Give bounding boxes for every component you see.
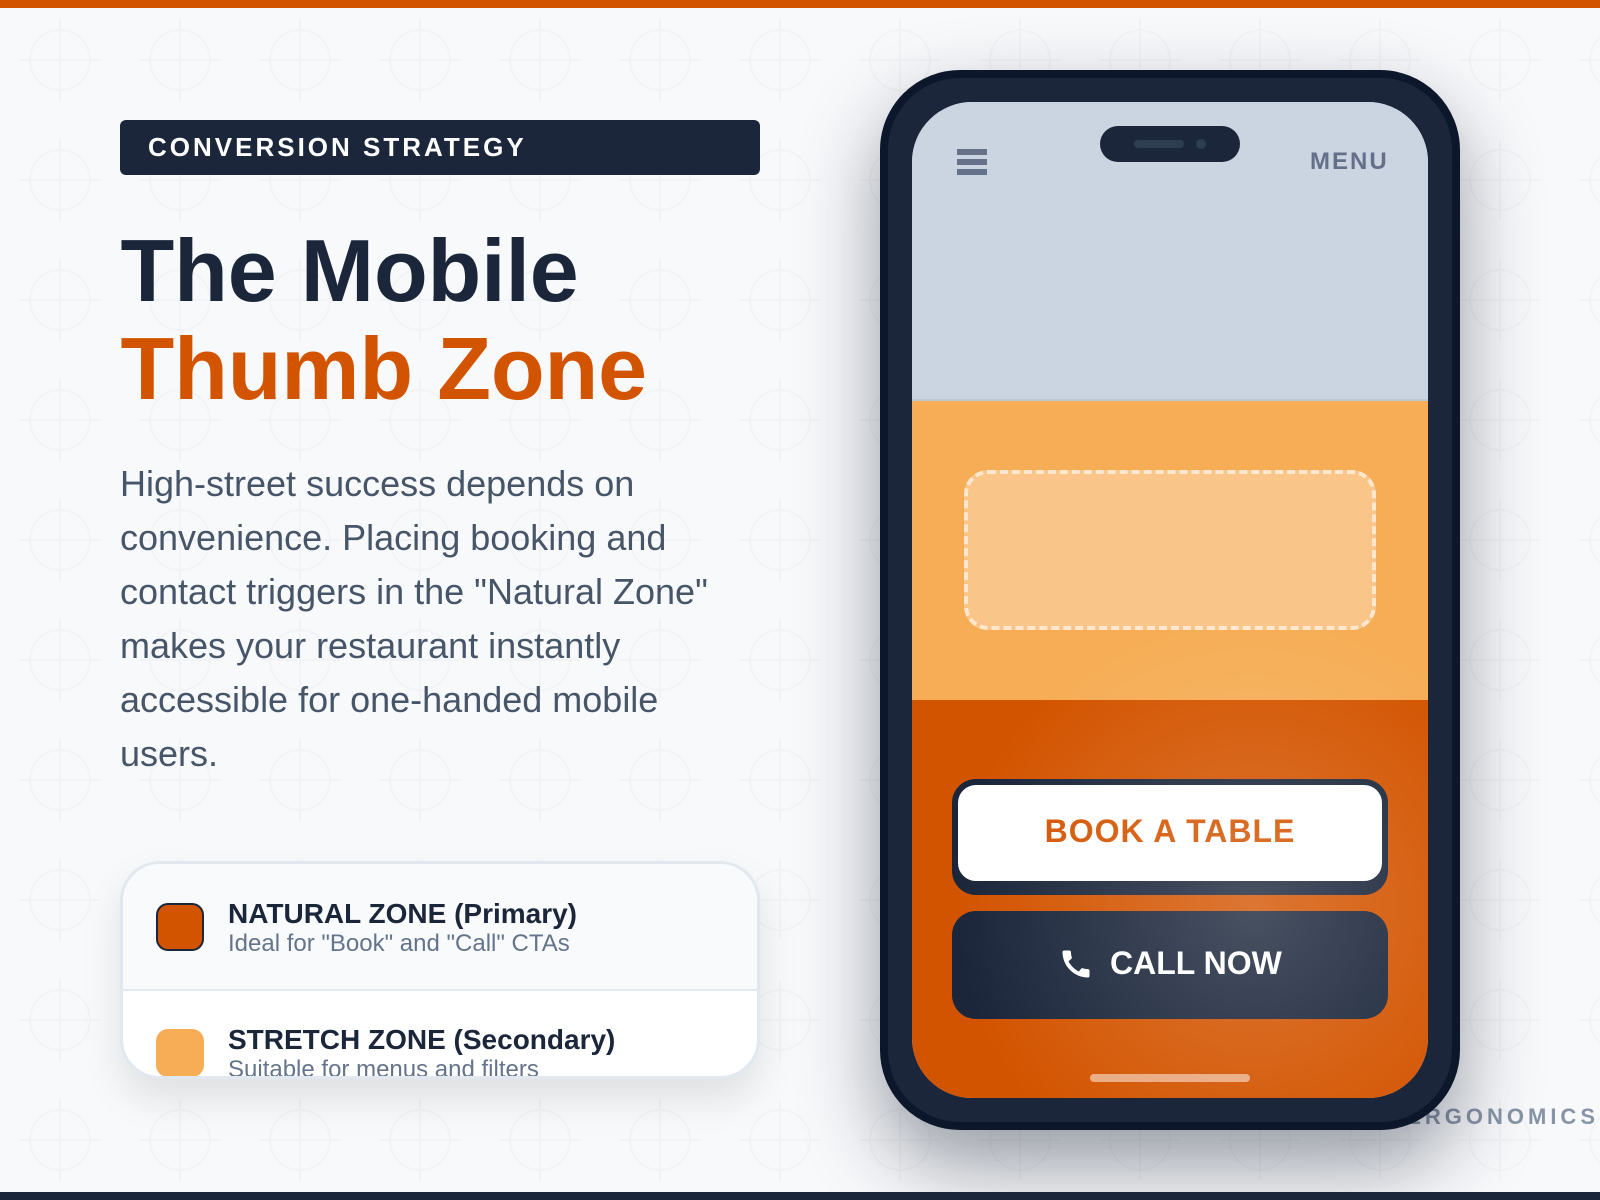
label: natural zone: NATURAL ZONE (Primary) (228, 898, 577, 929)
footer caption: MOBILE ERGONOMICS (1287, 1104, 1599, 1129)
dashed placeholder (964, 470, 1376, 630)
home indicator (1090, 1074, 1250, 1082)
swatch: natural zone (156, 903, 204, 951)
button: book a table: BOOK A TABLE (1045, 813, 1295, 849)
legend panel (120, 861, 760, 1079)
badge: conversion strategy: CONVERSION STRATEGY (148, 132, 527, 162)
icon: phone (1062, 950, 1090, 978)
label: natural zone (228, 898, 577, 957)
camera (1196, 139, 1206, 149)
speaker (1134, 140, 1184, 148)
button: call now (952, 911, 1388, 1019)
natural zone (912, 700, 1428, 1098)
label: stretch zone (228, 1024, 615, 1079)
title: Thumb Zone (120, 319, 647, 418)
legend row: stretch zone (123, 991, 757, 1118)
phone screen (912, 102, 1428, 1098)
phone notch (1100, 126, 1240, 162)
label: stretch zone: STRETCH ZONE (Secondary) (228, 1024, 615, 1055)
description text: contact triggers in the "Natural Zone" (120, 571, 708, 612)
badge: conversion strategy (120, 120, 760, 175)
top zone (912, 102, 1428, 401)
button: book a table (952, 779, 1388, 887)
thumb reach glow (953, 607, 1553, 1200)
description text: users. (120, 733, 218, 774)
description text: accessible for one-handed mobile (120, 679, 658, 720)
description text: makes your restaurant instantly (120, 625, 620, 666)
description text: High-street success depends on (120, 463, 634, 504)
phone mockup (880, 70, 1460, 1130)
top accent bar (0, 0, 1600, 8)
icon: hamburger menu (957, 149, 987, 175)
swatch: stretch zone (156, 1029, 204, 1077)
label: natural zone: Ideal for "Book" and "Call" CTAs (228, 930, 570, 957)
title: The Mobile (120, 221, 579, 320)
description text: convenience. Placing booking and (120, 517, 666, 558)
legend row: natural zone (123, 864, 757, 991)
call now label: CALL NOW (1110, 945, 1282, 981)
bottom bar (0, 1192, 1600, 1200)
menu label: MENU (1310, 148, 1389, 175)
stretch zone (912, 401, 1428, 700)
title (120, 221, 647, 418)
description text (120, 463, 708, 774)
